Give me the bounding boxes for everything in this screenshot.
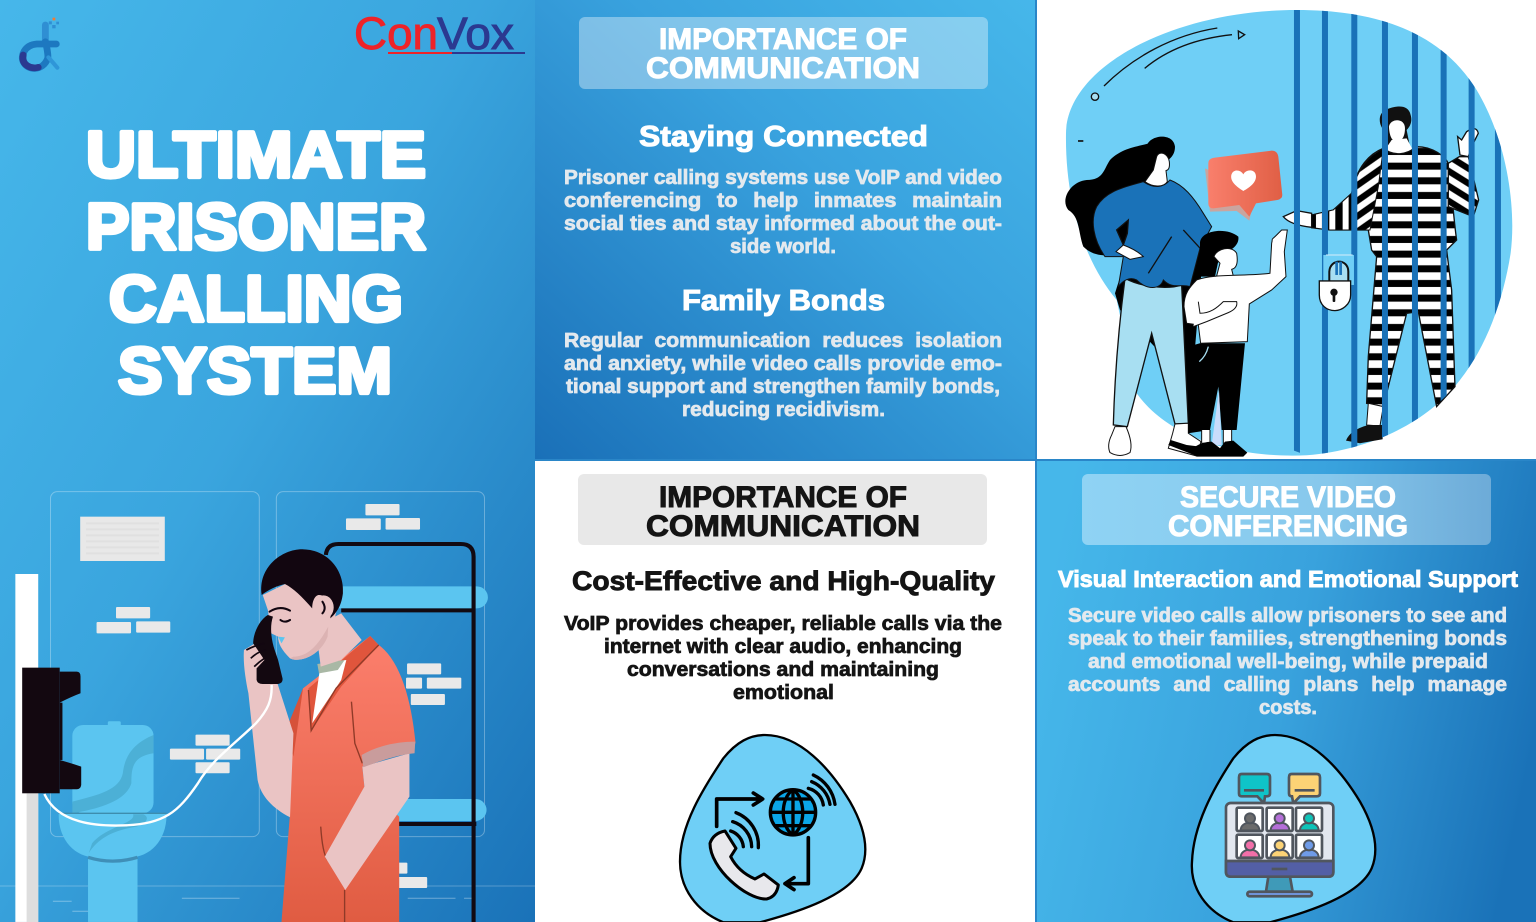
icon: video conference monitor <box>1192 735 1375 922</box>
text block: staying connected <box>564 166 1002 258</box>
subheading: visual interaction: Visual Interaction and Emotional Support <box>1058 566 1518 592</box>
panel: importance of communication (blue) <box>535 0 1035 460</box>
heading chip <box>578 474 987 545</box>
logo: ConVox: Con <box>354 8 438 59</box>
logo: d mark <box>22 18 59 68</box>
text block: voip: conversations and maintaining <box>627 658 939 681</box>
vent <box>80 517 165 561</box>
heading chip: CONFERENCING <box>1168 510 1408 543</box>
panel: family visiting illustration <box>1065 10 1512 457</box>
logo: ConVox: Vox <box>437 8 515 59</box>
phone cord <box>44 685 272 826</box>
text block: family bonds: and anxiety, while video calls provide emo- <box>564 352 1002 375</box>
text block: staying connected: Prisoner calling systems use VoIP and video <box>564 166 1002 189</box>
icon: voip phone and globe <box>680 735 865 922</box>
illustration: prisoner on payphone <box>0 492 535 922</box>
subheading: staying connected: Staying Connected <box>639 121 928 153</box>
text block: family bonds: Regular communication reduces isolation <box>564 329 1002 352</box>
heading chip: IMPORTANCE OF <box>659 23 907 56</box>
heading chip: COMMUNICATION <box>646 52 920 85</box>
heading chip: SECURE VIDEO <box>1180 481 1396 514</box>
text block: family bonds: reducing recidivism. <box>682 398 885 421</box>
title: PRISONER <box>86 190 426 263</box>
panel: secure video conferencing <box>1035 460 1536 922</box>
text block: staying connected: conferencing to help inmates maintain <box>564 189 1002 212</box>
subheading: family bonds: Family Bonds <box>682 285 885 317</box>
man: neck and face <box>316 613 362 667</box>
title: ULTIMATE <box>86 118 426 191</box>
payphone <box>22 668 81 793</box>
title <box>86 118 426 407</box>
jail bars <box>1294 7 1501 457</box>
text block: family bonds <box>564 329 1002 421</box>
title: SYSTEM <box>118 334 392 407</box>
subheading: cost-effective: Cost-Effective and High-Quality <box>572 566 995 596</box>
toilet <box>59 721 167 922</box>
heading chip <box>579 17 988 89</box>
wall pole <box>15 574 38 922</box>
text block: secure video calls <box>1068 604 1507 719</box>
panel: left title panel <box>0 0 535 922</box>
text block: staying connected: side world. <box>730 235 836 258</box>
text block: voip: VoIP provides cheaper, reliable calls via the <box>564 612 1002 635</box>
heading chip <box>1082 474 1491 545</box>
text block: staying connected: social ties and stay informed about the out- <box>564 212 1002 235</box>
handset <box>253 615 283 684</box>
bricks <box>97 504 461 888</box>
text block: secure video calls: accounts and calling plans help manage <box>1068 673 1507 696</box>
text block: voip <box>564 612 1002 704</box>
logo: ConVox <box>354 8 525 59</box>
chat bubble with heart <box>1205 151 1282 221</box>
text block: voip: internet with clear audio, enhancing <box>604 635 962 658</box>
blob background <box>1066 10 1512 456</box>
text block: secure video calls: speak to their families, strengthening bonds <box>1068 627 1507 650</box>
text block: voip: emotional <box>733 681 834 704</box>
text block: secure video calls: Secure video calls allow prisoners to see and <box>1068 604 1507 627</box>
man: sleeve cuff <box>362 742 415 767</box>
padlock <box>1319 255 1354 311</box>
heading chip: COMMUNICATION <box>646 510 920 543</box>
prisoner <box>1283 106 1479 443</box>
text block: family bonds: tional support and strengthen family bonds, <box>566 375 1000 398</box>
heading chip: IMPORTANCE OF <box>659 481 907 514</box>
bunk bed <box>326 544 488 922</box>
panel: cost-effective communication (white) <box>535 460 1035 922</box>
text block: secure video calls: and emotional well-being, while prepaid <box>1088 650 1488 673</box>
text block: secure video calls: costs. <box>1259 696 1317 719</box>
motion lines <box>1078 28 1245 141</box>
man: body <box>261 549 416 922</box>
child <box>1184 230 1287 457</box>
man: arms <box>244 637 409 890</box>
mother <box>1065 137 1212 456</box>
title: CALLING <box>109 262 403 335</box>
